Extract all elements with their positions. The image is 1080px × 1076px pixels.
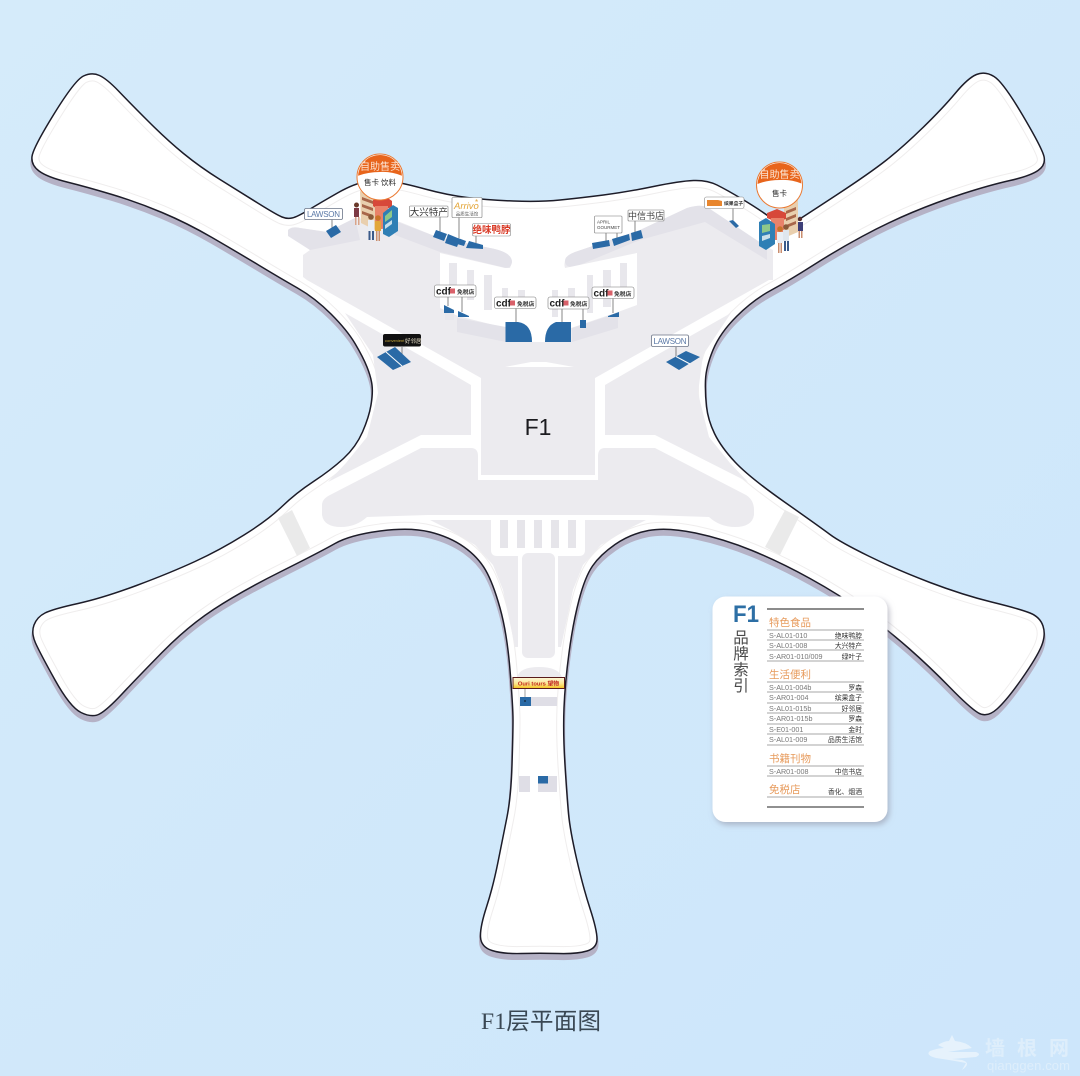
label: April Gourmet: GOURMET <box>597 225 620 230</box>
label: cdf left 1 <box>434 285 476 317</box>
category: 特色食品: 绝味鸭脖 <box>835 631 862 640</box>
label: Lawson right: LAWSON <box>654 337 687 346</box>
category: 生活便利: S-AL01-004b <box>769 683 811 692</box>
label: 绝味鸭脖: 绝味鸭脖 <box>472 224 511 236</box>
category: 生活便利: 罗森 <box>848 714 862 723</box>
category: 生活便利: 好邻居 <box>842 704 862 713</box>
label: cdf left 2: cdf <box>496 298 512 310</box>
category: 生活便利: 金时 <box>848 725 862 734</box>
floor label: F1: F1 <box>525 414 551 440</box>
callout: vending left: 售卡 饮料 <box>364 177 397 187</box>
label: cdf right 2: cdf <box>594 288 609 300</box>
category: 书籍刊物: S-AR01-008 <box>769 767 809 776</box>
category: 特色食品: S-AL01-010 <box>769 631 807 640</box>
label: Arrivo <box>452 198 482 238</box>
label: cdf left 1: cdf <box>436 286 452 298</box>
heading: 品牌索引: 品 <box>733 630 749 647</box>
vending area right <box>759 200 803 253</box>
label: cdf right 1: cdf <box>550 298 565 310</box>
label: 好邻居: convenient <box>385 338 405 343</box>
banner: duty free shop on stem: Ouri tours 望物 <box>518 680 559 688</box>
category: 生活便利: 罗森 <box>848 683 862 692</box>
category: 特色食品: S-AL01-008 <box>769 641 807 650</box>
label: Arrivo: Arrivo <box>453 201 479 212</box>
category: 生活便利: 生活便利 <box>769 668 811 681</box>
category: 特色食品: 大兴特产 <box>835 641 862 650</box>
watermark: qianggen.com <box>987 1058 1070 1073</box>
label: Arrivo: 品质生活馆 <box>456 210 479 218</box>
kiosk: stem lower <box>538 776 548 784</box>
floor areas <box>278 206 799 792</box>
category: 生活便利: S-AR01-015b <box>769 714 813 723</box>
label: cdf left 2 <box>494 297 536 342</box>
category: 生活便利: 品质生活馆 <box>828 735 862 744</box>
label: cdf right 1: 免税店 <box>570 300 588 308</box>
heading: 品牌索引: 引 <box>733 677 749 695</box>
category: 生活便利: S-AL01-009 <box>769 735 807 744</box>
watermark <box>928 1035 1080 1073</box>
label: Lawson left: LAWSON <box>307 210 340 219</box>
callout: vending right <box>756 162 803 208</box>
label: cdf left 2: 免税店 <box>517 300 535 308</box>
label: 中信书店 <box>628 210 664 241</box>
category: 生活便利 <box>767 668 864 745</box>
label: Lawson right <box>652 335 700 370</box>
banner: duty free shop on stem <box>513 678 564 706</box>
vending area left <box>354 191 398 241</box>
label: 缤果盒子 <box>704 197 744 228</box>
callout: vending right: 自助售卖 <box>760 168 800 181</box>
category: 生活便利: 缤果盒子 <box>835 693 862 702</box>
label: April Gourmet: APRIL <box>597 220 611 224</box>
category: 书籍刊物 <box>767 752 864 776</box>
floor plan outline <box>32 73 1044 959</box>
watermark: 墙根网 <box>985 1037 1080 1060</box>
label: 好邻居: 好邻居 <box>405 337 422 345</box>
category: 生活便利: S-AL01-015b <box>769 704 811 713</box>
category: 特色食品: 绿叶子 <box>842 652 862 661</box>
label: 中信书店: 中信书店 <box>628 210 664 221</box>
label: cdf left 1: 免税店 <box>457 288 475 296</box>
label: 绝味鸭脖 <box>472 224 511 243</box>
heading: F1: F1 <box>733 601 759 628</box>
callout: vending left <box>356 154 404 200</box>
label: cdf right 2 <box>592 287 634 317</box>
category: 生活便利: S-E01-001 <box>769 725 803 734</box>
heading: 品牌索引: 索 <box>733 661 749 679</box>
caption: F1层平面图 <box>481 1008 601 1035</box>
callout: vending right: 售卡 <box>772 188 787 198</box>
category: 书籍刊物: 中信书店 <box>835 767 862 776</box>
category: 特色食品 <box>767 616 864 661</box>
category: 特色食品: S-AR01-010/009 <box>769 652 823 661</box>
label: 大兴特产 <box>410 206 483 249</box>
label: April Gourmet <box>592 216 630 249</box>
label: 好邻居 <box>377 334 422 370</box>
category: 生活便利: S-AR01-004 <box>769 693 809 702</box>
category: 书籍刊物: 书籍刊物 <box>769 752 811 765</box>
panel: brand index <box>712 596 888 822</box>
label: 缤果盒子: 缤果盒子 <box>724 200 743 207</box>
category: 特色食品: 特色食品 <box>769 616 811 629</box>
category: 免税店: 免税店 <box>769 783 800 796</box>
heading: 品牌索引 <box>733 630 749 695</box>
label: Arrivo: * <box>475 198 478 207</box>
label: cdf right 1 <box>545 297 589 342</box>
label: 大兴特产: 大兴特产 <box>410 206 448 218</box>
label: Lawson left <box>304 208 342 238</box>
heading: 品牌索引: 牌 <box>733 645 749 663</box>
callout: vending left: 自助售卖 <box>360 160 400 173</box>
category: 免税店 <box>767 783 864 797</box>
category: 免税店: 香化、烟酒 <box>828 787 862 796</box>
label: cdf right 2: 免税店 <box>614 290 632 298</box>
